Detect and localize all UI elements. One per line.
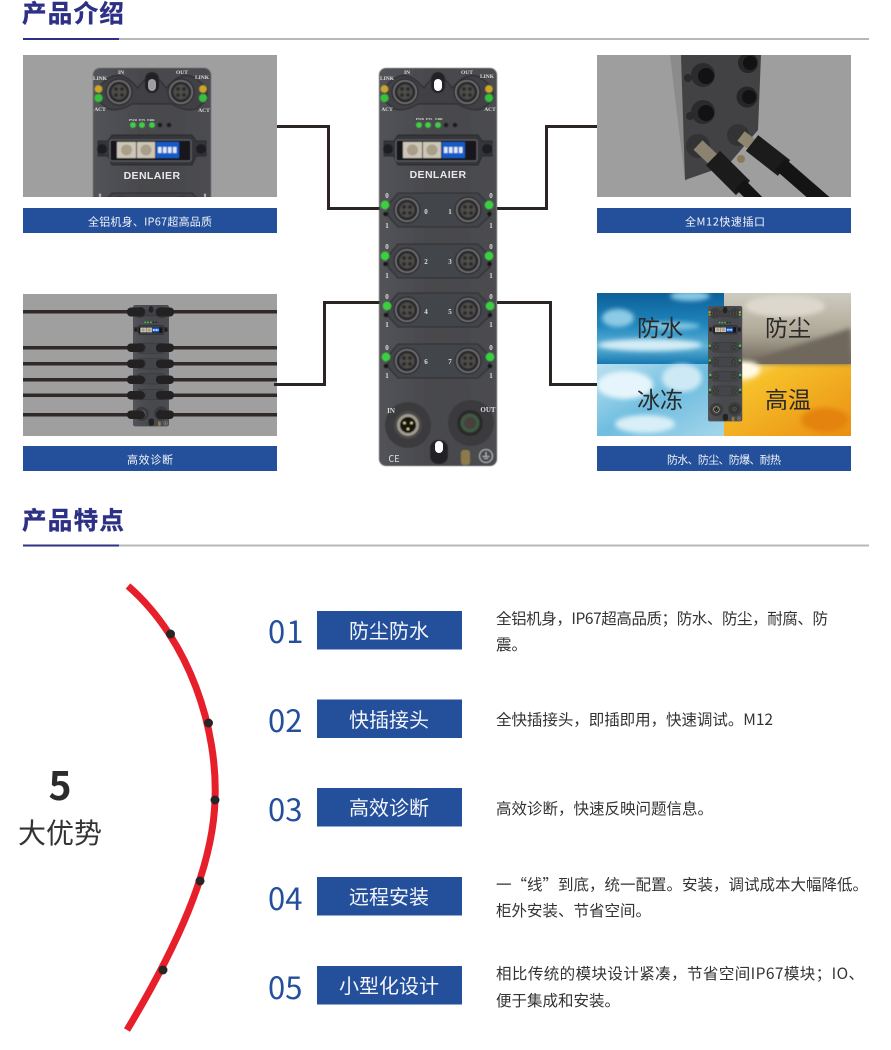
caption: 高效诊断: 高效诊断 — [127, 452, 173, 468]
central product: remote IO module: 0 — [385, 344, 389, 352]
caption: 全铝机身 — [23, 208, 277, 233]
panel: environment quadrants: 冰冻 — [637, 381, 683, 415]
feature 01: 01 — [268, 607, 304, 652]
heading: 5 大优势: 大优势 — [18, 812, 102, 852]
central product: remote IO module: 1 — [489, 272, 493, 280]
panel: aluminium body close-up: ETS — [139, 118, 145, 122]
panel: environment quadrants: 防尘 — [765, 309, 811, 343]
central product: remote IO module: 3 — [448, 258, 452, 266]
caption: 全M12快速插口: 全M12快速插口 — [685, 214, 765, 230]
feature 01 — [268, 607, 828, 655]
central product: remote IO module: 1 — [385, 272, 389, 280]
central product: remote IO module: 1 — [489, 372, 493, 380]
central product: remote IO module: 2 — [424, 258, 428, 266]
panel: aluminium body close-up: LINK — [93, 76, 108, 82]
feature 04: 一“线”到底，统一配置。安装，调试成本大幅降低。 — [496, 873, 868, 895]
feature 04: 04 — [268, 874, 302, 919]
panel: aluminium body close-up: ERR — [147, 118, 155, 122]
central product: remote IO module: OUT — [480, 406, 496, 414]
feature 02: 02 — [268, 696, 302, 741]
central product: remote IO module: 0 — [385, 192, 389, 200]
central product: remote IO module: DENLAIER — [410, 169, 466, 181]
panel: aluminium body close-up: DENLAIER — [124, 170, 180, 182]
feature 04 — [268, 873, 868, 921]
feature 01: 震。 — [496, 633, 527, 655]
panel: environment quadrants — [597, 291, 851, 436]
central product: remote IO module: 0 — [385, 243, 389, 251]
panel: aluminium body close-up: ACT — [198, 108, 210, 114]
feature 05 — [268, 962, 864, 1011]
panel: environment quadrants: 高温 — [765, 381, 811, 415]
central product: remote IO module: ETS — [426, 117, 432, 121]
panel: aluminium body close-up: PWR — [129, 118, 138, 122]
feature 05: 相比传统的模块设计紧凑，节省空间IP67模块；IO、 — [496, 962, 864, 984]
central product: remote IO module: 1 — [489, 222, 493, 230]
panel: aluminium body close-up: OUT — [176, 70, 188, 76]
feature 03: 高效诊断 — [349, 792, 429, 821]
central product: remote IO module: ACT — [381, 107, 393, 113]
central product: remote IO module: ERR — [435, 117, 443, 121]
central product: remote IO module: 1 — [385, 372, 389, 380]
central product: remote IO module — [379, 68, 497, 466]
caption: 防水防尘防爆耐热: 防水、防尘、防爆、耐热 — [667, 452, 781, 468]
panel: aluminium body close-up: ACT — [94, 107, 106, 113]
central product: remote IO module: LINK — [480, 74, 495, 80]
caption: 防水防尘防爆耐热 — [597, 446, 851, 471]
arc with five nodes — [127, 586, 220, 1030]
heading: 5 大优势: 5 — [48, 756, 72, 812]
feature 03: 03 — [268, 785, 302, 830]
central product: remote IO module: 1 — [385, 321, 389, 329]
feature 05: 小型化设计 — [339, 970, 439, 999]
central product: remote IO module: CE — [388, 452, 400, 465]
feature 04: 柜外安装、节省空间。 — [496, 899, 651, 921]
panel: aluminium body close-up: LINK — [195, 75, 210, 81]
heading: 5 大优势 — [18, 756, 102, 852]
central product: remote IO module: 0 — [385, 293, 389, 301]
central product: remote IO module: 6 — [424, 358, 428, 366]
panel: diagnostics with cables — [23, 294, 277, 436]
central product: remote IO module: 4 — [424, 308, 428, 316]
feature 01: 全铝机身，IP67超高品质；防水、防尘，耐腐、防 — [496, 607, 828, 629]
panel: aluminium body close-up: 0 — [99, 193, 102, 199]
feature 02: 全快插接头，即插即用，快速调试。M12 — [496, 708, 773, 730]
central product: remote IO module: PWR — [416, 117, 425, 121]
central product: remote IO module: 0 — [489, 293, 493, 301]
feature 02: 快插接头 — [349, 704, 429, 733]
feature 02 — [268, 696, 773, 741]
central product: remote IO module: 0 — [424, 208, 428, 216]
feature 03: 高效诊断，快速反映问题信息。 — [496, 797, 713, 819]
central product: remote IO module: LINK — [380, 76, 395, 82]
caption: 高效诊断 — [23, 446, 277, 471]
caption: 全铝机身: 全铝机身、IP67超高品质 — [88, 214, 212, 230]
title: 产品特点: 产品特点 — [22, 502, 125, 537]
central product: remote IO module: 0 — [489, 344, 493, 352]
panel: environment quadrants: 防水 — [637, 309, 683, 343]
feature 01: 防尘防水 — [349, 615, 429, 644]
panel: aluminium body close-up: 0 — [204, 193, 207, 199]
central product: remote IO module: IN — [404, 70, 410, 76]
central product: remote IO module: 1 — [448, 208, 452, 216]
central product: remote IO module: 5 — [448, 308, 452, 316]
caption: 全M12快速插口 — [597, 208, 851, 233]
panel: M12 connector photo — [597, 53, 851, 204]
feature 05: 05 — [268, 963, 302, 1008]
feature 04: 远程安装 — [349, 881, 429, 910]
panel: aluminium body close-up: IN — [118, 70, 124, 76]
central product: remote IO module: 0 — [489, 192, 493, 200]
central product: remote IO module: 0 — [489, 243, 493, 251]
central product: remote IO module: OUT — [461, 70, 473, 76]
central product: remote IO module: IN — [387, 407, 395, 415]
feature 03 — [268, 785, 713, 830]
feature 05: 便于集成和安装。 — [496, 989, 620, 1011]
central product: remote IO module: 1 — [385, 222, 389, 230]
panel: aluminium body close-up — [23, 55, 277, 197]
central product: remote IO module: ACT — [484, 107, 496, 113]
central product: remote IO module: 7 — [448, 358, 452, 366]
connector lines — [274, 126, 597, 384]
central product: remote IO module: 1 — [489, 321, 493, 329]
